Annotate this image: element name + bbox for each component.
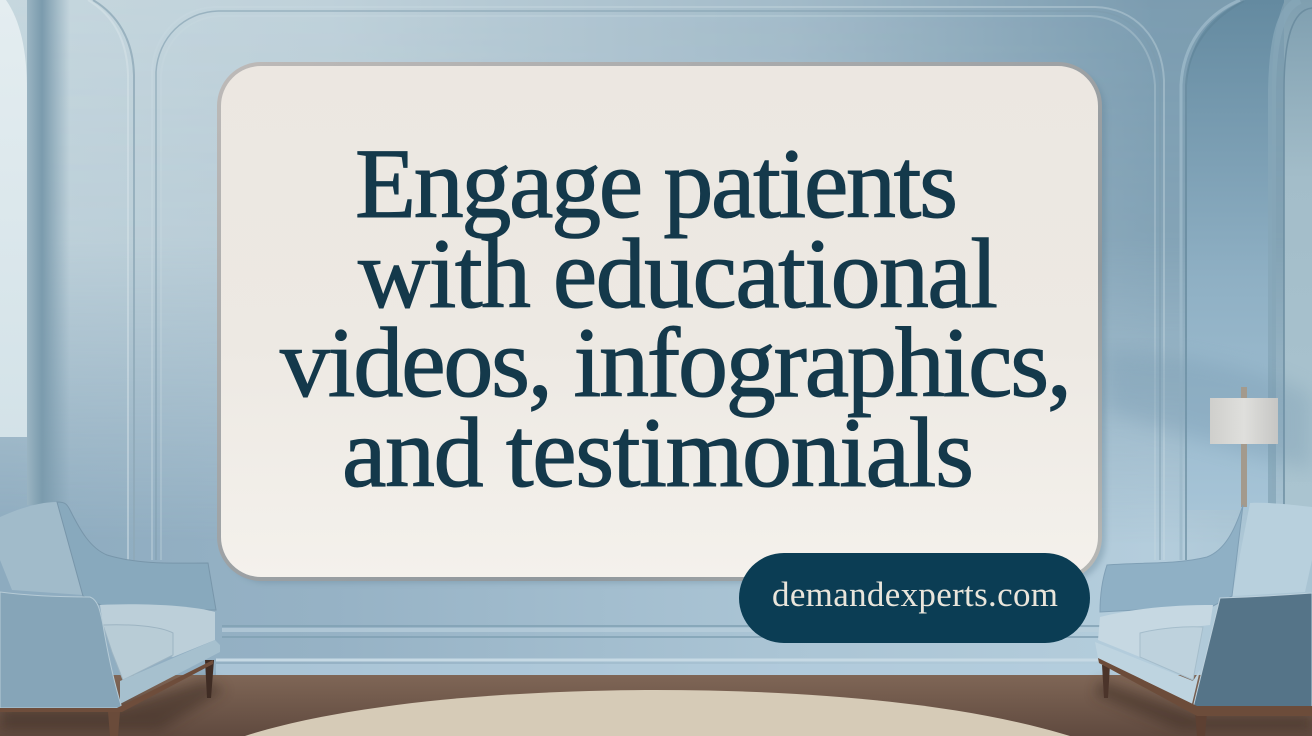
right arch bay and window (1181, 0, 1312, 560)
right armchair (1095, 503, 1312, 736)
floor lamp (1210, 387, 1278, 507)
floor shadows under chairs (0, 680, 1312, 730)
left armchair (0, 502, 220, 736)
website pill (739, 553, 1090, 643)
display board (219, 64, 1106, 583)
wall panel moulding (152, 7, 1164, 675)
title text: videos, infographics, (280, 307, 1072, 418)
left window and arch (0, 0, 134, 565)
title text: Engage patients (355, 128, 958, 239)
title text: with educational (358, 218, 998, 329)
rug (245, 690, 1070, 736)
title text: and testimonials (342, 397, 974, 508)
wall shadow near lamp (1105, 350, 1312, 470)
title text (280, 128, 1072, 508)
website pill: demandexperts.com (772, 575, 1058, 614)
floor (0, 675, 1312, 736)
